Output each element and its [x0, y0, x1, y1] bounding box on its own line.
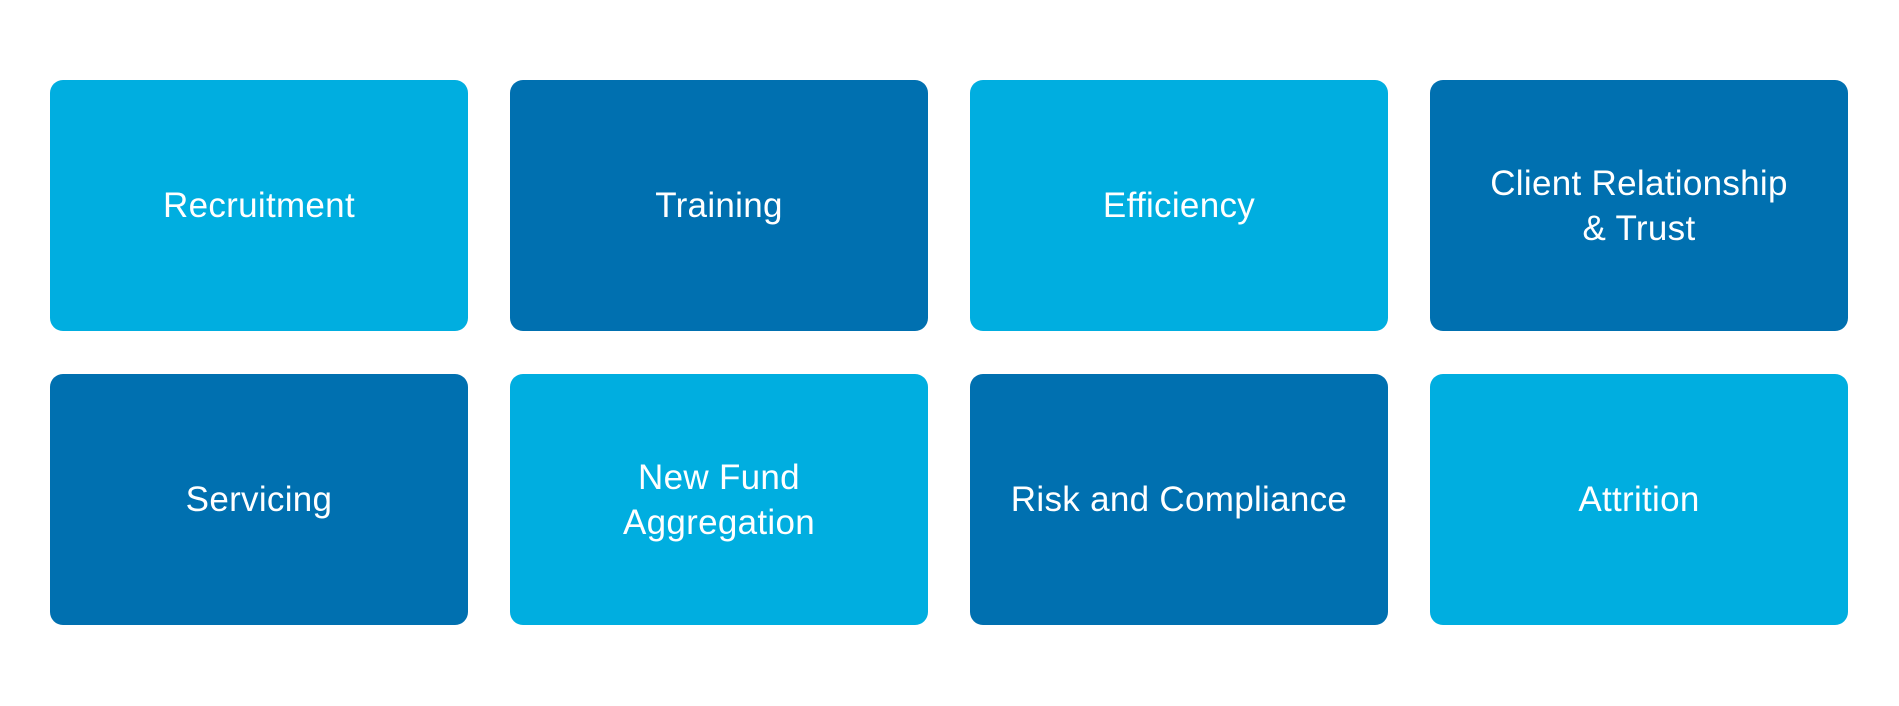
panel: Risk and Compliance — [970, 374, 1388, 625]
panel: Client Relationship & Trust: & Trust — [1583, 208, 1695, 248]
panel: Recruitment: Recruitment — [163, 186, 355, 225]
panel: Recruitment — [50, 80, 468, 331]
panel: Attrition — [1430, 374, 1848, 625]
panel: Servicing — [50, 374, 468, 625]
panel: New Fund Aggregation: Aggregation — [623, 502, 815, 542]
panel: Servicing: Servicing — [186, 480, 332, 519]
panel: Attrition: Attrition — [1578, 480, 1700, 519]
panel: Client Relationship & Trust: Client Relationship — [1490, 164, 1788, 202]
panel: Efficiency: Efficiency — [1103, 186, 1255, 225]
panel: Training: Training — [655, 186, 783, 225]
panel: Client Relationship & Trust — [1430, 80, 1848, 331]
panel: Efficiency — [970, 80, 1388, 331]
panel: Training — [510, 80, 928, 331]
panel: Risk and Compliance: Risk and Compliance — [1011, 480, 1347, 519]
panel: New Fund Aggregation — [510, 374, 928, 625]
panel: New Fund Aggregation: New Fund — [638, 458, 800, 496]
